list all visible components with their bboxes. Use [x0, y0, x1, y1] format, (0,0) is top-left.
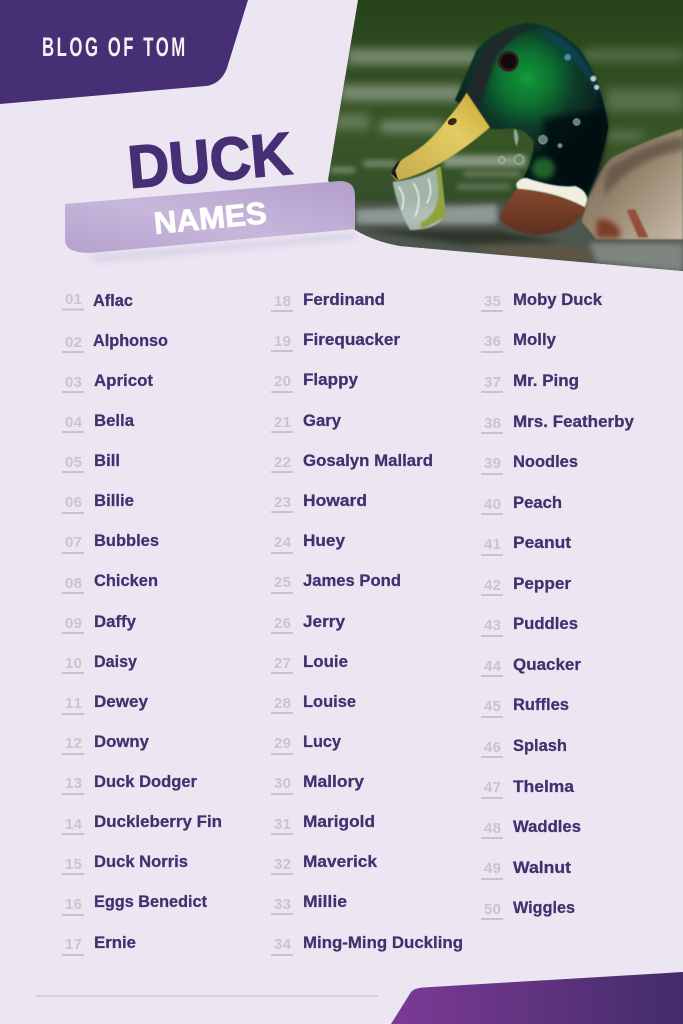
name 33: Millie	[303, 893, 347, 911]
name 09	[62, 613, 137, 633]
name 04: 04	[65, 414, 83, 431]
column 2 names	[271, 291, 463, 955]
name 21	[271, 412, 342, 432]
name 45: 45	[484, 698, 501, 715]
name 49: Walnut	[513, 859, 572, 877]
name 38	[481, 413, 635, 433]
name 18: Ferdinand	[303, 291, 385, 309]
name 36: 36	[484, 333, 501, 350]
name 46: Splash	[513, 737, 567, 755]
head crown shading	[467, 26, 532, 108]
name 14	[62, 813, 222, 834]
name 16: 16	[65, 896, 82, 913]
name 42	[481, 575, 572, 595]
name 50: 50	[484, 901, 501, 918]
name 38: 38	[484, 415, 501, 432]
name 06: Billie	[94, 492, 134, 510]
name 05: 05	[65, 454, 82, 471]
name 45: Ruffles	[513, 696, 569, 714]
name 31: Marigold	[303, 813, 375, 831]
name 27: Louie	[303, 653, 348, 671]
eye	[498, 51, 519, 72]
name 28: Louise	[303, 693, 356, 711]
name 32	[271, 853, 378, 874]
name 26	[271, 613, 346, 633]
head top blue sheen	[537, 28, 602, 100]
name 41: Peanut	[513, 534, 572, 552]
name 13: Duck Dodger	[94, 773, 198, 791]
name 36	[481, 331, 557, 352]
name 09: 09	[65, 615, 82, 632]
name 50	[481, 899, 575, 919]
name 22: Gosalyn Mallard	[303, 452, 433, 470]
name 35: Moby Duck	[513, 291, 603, 309]
name 41	[481, 534, 572, 555]
name 31	[271, 813, 375, 834]
name 41: 41	[484, 536, 501, 553]
name 07: 07	[65, 534, 82, 551]
name 23: Howard	[303, 492, 367, 510]
name 03: Apricot	[94, 372, 154, 390]
title: NAMES: NAMES	[152, 195, 268, 241]
name 34	[271, 934, 463, 955]
water stream	[393, 167, 445, 230]
name 48: Waddles	[513, 818, 581, 836]
name 19: 19	[274, 333, 291, 350]
name 14: Duckleberry Fin	[94, 813, 222, 831]
photo: mallard duck drinking water	[320, 0, 683, 285]
name 39: 39	[484, 455, 501, 472]
water streaks	[398, 178, 430, 217]
name 10	[62, 653, 138, 673]
name 38: Mrs. Featherby	[513, 413, 635, 431]
name 20	[271, 371, 359, 392]
name 35: 35	[484, 293, 501, 310]
name 37: Mr. Ping	[513, 372, 579, 390]
name 48: 48	[484, 820, 501, 837]
name 44: Quacker	[513, 656, 582, 674]
name 18	[271, 291, 385, 311]
name 40	[481, 494, 562, 514]
name 39	[481, 453, 578, 474]
name 16: Eggs Benedict	[94, 893, 207, 911]
name 44: 44	[484, 658, 502, 675]
foreground ripples	[354, 200, 683, 271]
name 39: Noodles	[513, 453, 578, 471]
name 49	[481, 859, 572, 879]
name 50: Wiggles	[513, 899, 575, 917]
green water highlight	[420, 167, 446, 229]
pupil	[501, 54, 516, 69]
name 03: 03	[65, 374, 82, 391]
bill tip	[391, 160, 401, 181]
name 46: 46	[484, 739, 501, 756]
name 48	[481, 818, 581, 838]
name 24: 24	[274, 534, 292, 551]
drips	[498, 54, 599, 164]
name 27: 27	[274, 655, 291, 672]
body markings	[597, 137, 683, 238]
breast	[500, 188, 587, 235]
duck body	[582, 128, 683, 239]
name 30	[271, 773, 365, 794]
neck shadow	[543, 112, 607, 195]
name 42: Pepper	[513, 575, 572, 593]
name 44	[481, 656, 582, 676]
name 25	[271, 572, 401, 593]
name 17: Ernie	[94, 934, 136, 952]
name 20: 20	[274, 373, 291, 390]
title: DUCK: DUCK	[125, 120, 295, 201]
name 02: 02	[65, 334, 82, 351]
name 01	[62, 291, 133, 310]
name 06	[62, 492, 134, 513]
lower water highlights	[330, 155, 527, 189]
name 21: Gary	[303, 412, 342, 430]
name 49: 49	[484, 860, 501, 877]
body red streak	[627, 209, 648, 237]
name 26: 26	[274, 615, 291, 632]
name 15	[62, 853, 188, 874]
name 08: Chicken	[94, 572, 158, 590]
name 40: Peach	[513, 494, 562, 512]
name 07	[62, 532, 159, 553]
name 37	[481, 372, 579, 392]
name 28: 28	[274, 695, 291, 712]
name 25: 25	[274, 574, 291, 591]
water reflections	[333, 48, 683, 141]
logo text: BLOG OF TOM	[42, 32, 185, 62]
name 40: 40	[484, 496, 501, 513]
name 02	[62, 332, 168, 352]
name 37: 37	[484, 374, 501, 391]
name 25: James Pond	[303, 572, 401, 590]
name 30: 30	[274, 775, 291, 792]
name 20: Flappy	[303, 371, 359, 389]
white collar	[516, 178, 587, 207]
name 47: Thelma	[513, 778, 575, 796]
name 43: 43	[484, 617, 501, 634]
name 10: Daisy	[94, 653, 138, 671]
name 18: 18	[274, 293, 291, 310]
footer panel	[391, 972, 683, 1024]
name 13: 13	[65, 775, 82, 792]
name 47: 47	[484, 779, 501, 796]
name 34: 34	[274, 936, 292, 953]
name 34: Ming-Ming Duckling	[303, 934, 463, 952]
name 17: 17	[65, 936, 82, 953]
name 42: 42	[484, 577, 501, 594]
name 12: 12	[65, 735, 82, 752]
name 33: 33	[274, 896, 291, 913]
name 09: Daffy	[94, 613, 137, 631]
banner	[65, 181, 355, 253]
name 13	[62, 773, 198, 794]
name 07: Bubbles	[94, 532, 159, 550]
name 43	[481, 615, 578, 636]
name 35	[481, 291, 603, 311]
name 08: 08	[65, 575, 82, 592]
name 32: Maverick	[303, 853, 378, 871]
name 12	[62, 733, 150, 754]
name 21: 21	[274, 414, 291, 431]
name 33	[271, 893, 347, 914]
name 30: Mallory	[303, 773, 365, 791]
name 17	[62, 934, 136, 955]
head and neck	[455, 23, 608, 197]
name 11: 11	[65, 695, 82, 712]
name 45	[481, 696, 569, 717]
name 22: 22	[274, 454, 291, 471]
name 28	[271, 693, 356, 713]
column 1 names	[62, 291, 222, 955]
name 01: Aflac	[93, 292, 133, 310]
banner shadow	[85, 232, 355, 263]
name 19: Firequacker	[303, 331, 401, 349]
name 47	[481, 778, 575, 798]
name 29	[271, 733, 342, 754]
name 43: Puddles	[513, 615, 578, 633]
logo panel	[0, 0, 248, 104]
name 01: 01	[65, 291, 82, 308]
name 11	[62, 693, 149, 714]
name 36: Molly	[513, 331, 557, 349]
name 23: 23	[274, 494, 291, 511]
name 12: Downy	[94, 733, 150, 751]
neck green patch	[532, 158, 555, 179]
name 16	[62, 893, 207, 915]
name 04	[62, 412, 135, 432]
name 24	[271, 532, 346, 553]
name 19	[271, 331, 401, 351]
name 15: 15	[65, 856, 82, 873]
name 46	[481, 737, 567, 757]
name 10: 10	[65, 655, 82, 672]
name 15: Duck Norris	[94, 853, 188, 871]
name 23	[271, 492, 367, 512]
name 04: Bella	[94, 412, 135, 430]
name 08	[62, 572, 158, 593]
name 05: Bill	[94, 452, 120, 470]
name 02: Alphonso	[93, 332, 168, 350]
name 11: Dewey	[94, 693, 149, 711]
name 27	[271, 653, 348, 673]
bill	[391, 93, 490, 181]
name 06: 06	[65, 494, 82, 511]
nostril	[448, 118, 457, 126]
name 29: Lucy	[303, 733, 342, 751]
name 24: Huey	[303, 532, 346, 550]
name 26: Jerry	[303, 613, 346, 631]
name 32: 32	[274, 856, 291, 873]
name 29: 29	[274, 735, 291, 752]
name 05	[62, 452, 120, 472]
column 3 names	[481, 291, 635, 919]
name 14: 14	[65, 816, 83, 833]
name 03	[62, 372, 154, 392]
name 31: 31	[274, 816, 291, 833]
